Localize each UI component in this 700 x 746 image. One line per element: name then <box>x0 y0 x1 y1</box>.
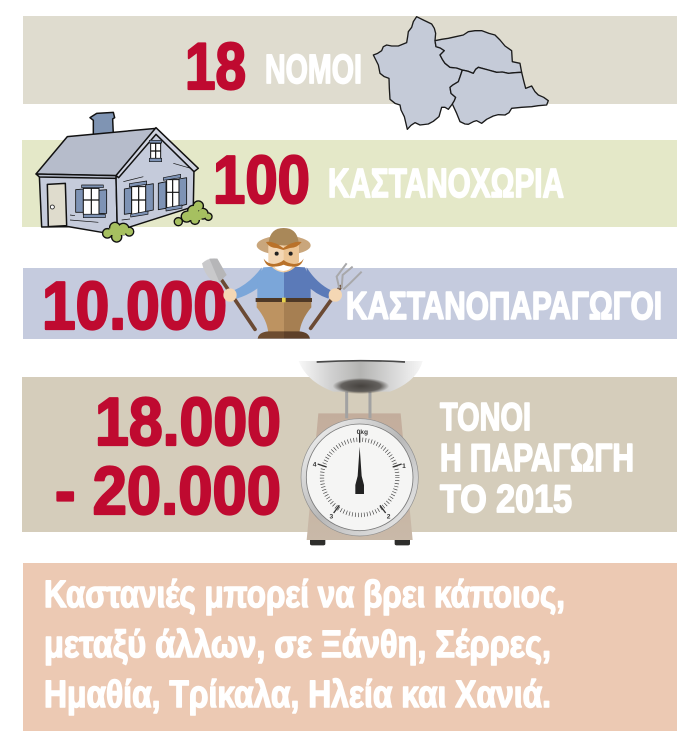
stat: 18 prefectures: 18 <box>185 29 246 103</box>
shovel <box>202 258 255 329</box>
moustache <box>264 259 304 267</box>
belt <box>256 298 312 302</box>
hat crown <box>269 228 299 245</box>
shirt <box>257 266 284 299</box>
stat: 18 prefectures: ΝΟΜΟΙ <box>265 46 362 92</box>
icon: kitchen scale: 3 <box>329 513 333 520</box>
icon: map of three regions <box>373 17 548 129</box>
stat: production range: - 20.000 <box>55 453 281 529</box>
face <box>268 243 299 272</box>
stat: 100 villages: 100 <box>213 142 310 218</box>
eyes <box>275 252 279 256</box>
icon: house <box>36 112 212 242</box>
text: where chestnut trees grow <box>44 574 565 716</box>
hair <box>266 242 302 250</box>
panel: 100 villages band <box>22 140 677 227</box>
stat: 100 villages: ΚΑΣΤΑΝΟΧΩΡΙΑ <box>328 160 564 206</box>
stat: 100 villages <box>213 142 564 218</box>
icon: kitchen scale: 0kg <box>357 429 368 436</box>
text: tonnes produced in 2015: Η ΠΑΡΑΓΩΓΗ <box>440 437 634 480</box>
stat: production range <box>55 384 281 529</box>
panel: 18 prefectures band <box>23 16 677 104</box>
pitchfork <box>311 263 362 328</box>
hat brim <box>257 236 311 255</box>
icon: kitchen scale <box>299 361 423 545</box>
bush: front <box>103 222 134 242</box>
trousers <box>257 302 284 333</box>
text: where chestnut trees grow: Ημαθία, Τρίκαλα, Ηλεία και Χανιά. <box>44 674 551 716</box>
text: where chestnut trees grow: Καστανιές μπορεί να βρει κάποιος, <box>44 574 565 616</box>
boots <box>258 331 284 339</box>
icon: kitchen scale: 4 <box>313 462 317 469</box>
stat: 18 prefectures <box>185 29 362 103</box>
icon: farmer with shovel and fork <box>202 228 362 339</box>
text: tonnes produced in 2015 <box>440 396 634 521</box>
panel: production band <box>22 377 677 532</box>
needle <box>355 447 364 494</box>
stat: 10,000 producers <box>42 268 662 344</box>
panel: 10,000 producers band <box>23 268 677 339</box>
arms <box>233 267 262 299</box>
smile <box>274 265 293 271</box>
pan stem <box>347 392 370 418</box>
text: tonnes produced in 2015: ΤΟ 2015 <box>440 478 572 521</box>
feet <box>310 538 410 545</box>
bush: right <box>174 201 212 226</box>
icon: kitchen scale: 1 <box>402 463 406 470</box>
text: tonnes produced in 2015: ΤΟΝΟΙ <box>440 396 531 439</box>
icon: kitchen scale: 2 <box>387 513 391 520</box>
stat: 10,000 producers: 10.000 <box>42 268 227 344</box>
scale body <box>307 413 413 540</box>
text: where chestnut trees grow: μεταξύ άλλων, σε Ξάνθη, Σέρρες, <box>44 624 551 666</box>
panel: locations note band <box>23 563 677 731</box>
pan <box>299 361 423 392</box>
stat: production range: 18.000 <box>95 384 281 460</box>
dial <box>301 419 418 536</box>
